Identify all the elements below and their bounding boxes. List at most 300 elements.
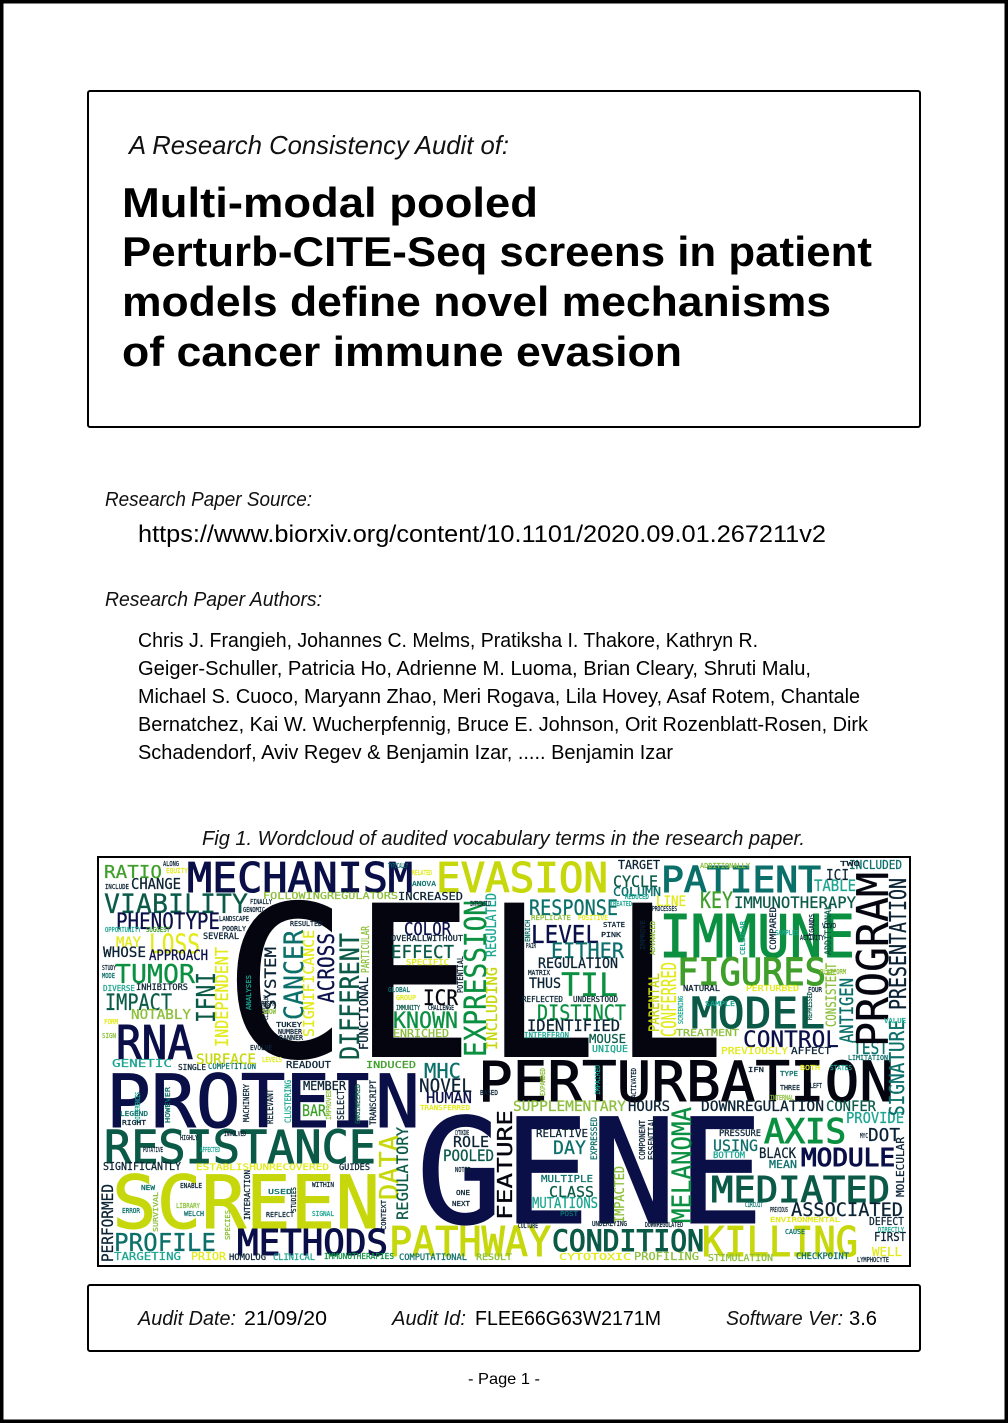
- medium horizontal words: GENETIC: [112, 1057, 172, 1070]
- medium horizontal words: CONTROL: [743, 1028, 839, 1053]
- small filler words: ENABLE: [180, 1182, 202, 1190]
- vertical words: PERFORMED: [98, 1184, 117, 1262]
- small filler words: FORM: [104, 1018, 118, 1026]
- small filler words: VALUE: [884, 1017, 906, 1025]
- small filler words: PUTATIVE: [143, 1146, 163, 1154]
- large words: FIGURES: [677, 951, 826, 994]
- medium horizontal words: CONFER: [826, 1099, 877, 1115]
- medium horizontal words: REGULATION: [538, 956, 618, 972]
- vertical words: MELANOMA: [667, 1107, 698, 1223]
- medium horizontal words: [103, 858, 906, 1264]
- large words: AXIS: [764, 1112, 846, 1152]
- medium horizontal words: EFFECT: [391, 942, 454, 963]
- small filler words: CULTURE: [518, 1222, 538, 1230]
- large words: PATHWAY: [389, 1218, 551, 1266]
- vertical words: ENRICH: [524, 920, 532, 942]
- small filler words: INTRINSIC: [470, 900, 490, 908]
- medium horizontal words: ICI: [826, 866, 849, 884]
- small filler words: WITHIN: [312, 1181, 334, 1189]
- small filler words: REFLECT: [266, 1211, 295, 1219]
- medium horizontal words: SINGLE: [178, 1063, 206, 1072]
- small filler words: CHALLENGE: [428, 1004, 454, 1012]
- word: CELL: E: [354, 863, 473, 1106]
- medium horizontal words: RESULT: [476, 1253, 513, 1263]
- panel: audit footer: Audit Id:: [391, 1308, 466, 1330]
- large words: [104, 854, 895, 1266]
- small filler words: TWO: [840, 860, 860, 868]
- word: CELL: [224, 863, 724, 1106]
- medium horizontal words: COLUMN: [613, 885, 661, 899]
- vertical words: ADVANCED: [649, 921, 657, 955]
- vertical words: PRESENTATION: [886, 878, 912, 1010]
- vertical words: PARENTAL: [647, 973, 663, 1032]
- vertical words: EXPRESSION: [459, 900, 494, 1057]
- medium horizontal words: INCLUDED: [849, 858, 902, 872]
- vertical words: SCREENING: [677, 996, 685, 1024]
- medium horizontal words: OVERALLWITHOUT: [391, 934, 463, 943]
- small filler words: SUGGEST: [146, 926, 171, 934]
- medium horizontal words: AFFECT: [791, 1046, 831, 1057]
- medium horizontal words: DISTINCT: [537, 1001, 626, 1025]
- small filler words: VIVO: [822, 922, 836, 930]
- panel: audit footer: FLEE66G63W2171M: [475, 1308, 661, 1330]
- medium horizontal words: DOWNREGULATION: [701, 1099, 824, 1115]
- small filler words: GLOBAL: [388, 986, 410, 994]
- small filler words: ACTIVITY: [800, 934, 825, 942]
- small filler words: SAMPLE: [705, 1000, 735, 1008]
- medium horizontal words: PROFILING: [634, 1250, 699, 1263]
- medium horizontal words: CHANGE: [131, 875, 181, 893]
- vertical words: SIGNATURE: [885, 1020, 909, 1116]
- small filler words: REDUCED: [625, 893, 649, 901]
- medium horizontal words: HUMAN: [426, 1089, 472, 1107]
- large words: IMMUNE: [659, 902, 855, 971]
- large words: MEDIATED: [711, 1170, 890, 1211]
- medium horizontal words: SEVERAL: [203, 932, 239, 942]
- small filler words: POSITIVE: [578, 914, 608, 922]
- small filler words: BANNER: [279, 1034, 304, 1042]
- medium horizontal words: TIL: [561, 966, 618, 1004]
- small filler words: ADDITIONALLY: [700, 862, 751, 870]
- vertical words: CONSISTENT: [824, 963, 840, 1027]
- small filler words: LANDSCAPE: [219, 915, 249, 923]
- medium horizontal words: WHOSE: [103, 945, 146, 961]
- small filler words: THREE: [780, 1084, 800, 1092]
- medium horizontal words: RATIO: [104, 862, 162, 883]
- medium horizontal words: PERTURBED: [746, 984, 799, 993]
- small filler words: RESULTED: [290, 920, 322, 928]
- medium horizontal words: MOUSE: [589, 1032, 626, 1046]
- medium horizontal words: TABLE: [814, 876, 856, 895]
- title: paper name: Multi-modal pooled: [122, 179, 538, 226]
- small filler words: INTERNAL: [770, 1094, 794, 1102]
- small filler words: CAUSE: [785, 1228, 805, 1236]
- vertical words: DATA: [375, 1135, 405, 1200]
- text block: research paper authors: Bernatchez, Kai W. Wucherpfennig, Bruce E. Johnson, Orit Rozenblatt-Rosen, Dirk: [138, 714, 869, 736]
- subtitle: audit heading: A Research Consistency Audit of:: [127, 130, 509, 160]
- small filler words: TYPICALLY: [388, 862, 408, 870]
- vertical words: DIFFERENT: [335, 933, 366, 1060]
- small filler words: ANOVA: [412, 880, 437, 888]
- medium horizontal words: UNDERSTOOD: [573, 995, 618, 1004]
- vertical words: PROGRAM: [848, 872, 899, 1047]
- panel: audit footer: Software Ver:: [726, 1308, 843, 1330]
- medium horizontal words: COMPETITION: [208, 1062, 256, 1071]
- medium horizontal words: IDENTIFIED: [527, 1016, 620, 1035]
- small filler words: CRISPR: [259, 1000, 275, 1008]
- small filler words: STATES: [830, 1064, 852, 1072]
- medium horizontal words: TEST: [853, 1038, 888, 1059]
- small filler words: TRANSFERRED: [420, 1104, 470, 1112]
- medium horizontal words: RESPONSE: [529, 896, 618, 920]
- vertical words: [98, 872, 912, 1262]
- medium horizontal words: GUIDES: [339, 1163, 370, 1173]
- vertical words: STUDIES: [290, 1187, 298, 1212]
- small filler words: DOWNREGULATED: [645, 1221, 683, 1229]
- vertical words: IFNI: [192, 972, 222, 1023]
- vertical words: ESSENTIAL: [647, 1117, 658, 1160]
- small filler words: RIGHT: [122, 1119, 147, 1127]
- medium horizontal words: CHECKPOINT: [796, 1252, 850, 1262]
- large words: GENE: [416, 1088, 764, 1258]
- medium horizontal words: USING: [713, 1136, 758, 1155]
- vertical words: EXPANDED: [539, 1068, 547, 1096]
- small filler words: PREVIOUS: [770, 1206, 788, 1214]
- text block: research paper source: https://www.biorxiv.org/content/10.1101/2020.09.01.267211v2: [138, 521, 826, 548]
- medium horizontal words: FIRST: [874, 1230, 906, 1244]
- text block: research paper authors: Chris J. Frangieh, Johannes C. Melms, Pratiksha I. Thakore, Kathryn R.: [138, 630, 758, 652]
- large words: MODULE: [801, 1143, 895, 1172]
- medium horizontal words: COLOR: [404, 919, 451, 940]
- vertical words: IMPAIRED: [594, 1065, 602, 1095]
- vertical words: ENGINEERED: [354, 1084, 362, 1124]
- medium horizontal words: PRIOR: [191, 1250, 226, 1263]
- small filler words: LEFT: [810, 1082, 823, 1090]
- medium horizontal words: MAY: [116, 935, 142, 951]
- small filler words: PLATFORM: [820, 968, 846, 976]
- large words: SCREEN: [112, 1161, 380, 1246]
- vertical words: POTENTIAL: [456, 956, 465, 993]
- medium horizontal words: BLACK: [759, 1146, 796, 1162]
- medium horizontal words: MEMBER: [303, 1079, 347, 1093]
- medium horizontal words: INHIBITORS: [136, 983, 188, 993]
- large words: MODEL: [691, 989, 825, 1039]
- small filler words: INVOLVED: [224, 1130, 246, 1138]
- medium horizontal words: SIGNIFICANTLY: [103, 1160, 181, 1173]
- title: paper name: models define novel mechanisms: [122, 278, 831, 325]
- medium horizontal words: INTERFERON: [524, 1031, 569, 1040]
- small filler words: TREATED: [610, 900, 632, 908]
- small filler words: LYMPHOCYTE: [857, 1256, 889, 1264]
- vertical words: FEATURE: [493, 1110, 517, 1220]
- title: paper name: [122, 179, 872, 375]
- vertical words: SELECT: [336, 1090, 347, 1120]
- small filler words: SAMPLES: [775, 929, 799, 937]
- panel: audit footer: [88, 1285, 920, 1351]
- small filler words: REPLICATE: [531, 914, 571, 922]
- text block: research paper authors: Research Paper Authors:: [105, 589, 322, 611]
- vertical words: ACTIVATED: [630, 1068, 638, 1098]
- medium horizontal words: MULTIPLE: [541, 1174, 593, 1185]
- medium horizontal words: MEAN: [769, 1158, 797, 1171]
- medium horizontal words: VIABILITY: [104, 889, 248, 920]
- small filler words: PINK: [601, 931, 622, 939]
- medium horizontal words: CLINICAL: [273, 1253, 315, 1263]
- vertical words: RELEVANT: [266, 1089, 276, 1124]
- large words: EVASION: [436, 854, 608, 902]
- vertical words: EXPRESSED: [590, 1117, 600, 1160]
- medium horizontal words: PHENOTYPE: [116, 910, 220, 935]
- small filler words: EVOLVE: [250, 1044, 272, 1052]
- vertical words: MOLECULAR: [894, 1137, 907, 1197]
- panel: audit footer: 3.6: [849, 1308, 877, 1330]
- small filler words: MATRIX: [528, 969, 551, 977]
- small filler words: SIGN: [102, 1032, 116, 1040]
- medium horizontal words: REFLECTED: [522, 995, 563, 1004]
- medium horizontal words: DIVERSE: [103, 984, 135, 993]
- medium horizontal words: INCREASED: [398, 890, 463, 903]
- medium horizontal words: ESTABLISHUNRECOVERED: [196, 1163, 329, 1173]
- vertical words: COMPARED: [769, 907, 779, 950]
- medium horizontal words: READOUT: [286, 1060, 331, 1071]
- small filler words: FINALLY: [250, 898, 273, 906]
- small filler words: POST: [560, 1210, 579, 1218]
- medium horizontal words: CYTOTOXIC: [559, 1252, 631, 1263]
- vertical words: LIGANDS: [808, 914, 816, 940]
- vertical words: FUNCTIONAL: [357, 977, 371, 1050]
- small filler words: RELATED: [412, 869, 432, 877]
- medium horizontal words: NOVEL: [419, 1075, 472, 1097]
- text block: research paper source: [105, 489, 826, 548]
- medium horizontal words: APPROACH: [149, 948, 208, 964]
- small filler words: LEVELS: [262, 1056, 282, 1064]
- medium horizontal words: PROFILE: [114, 1228, 216, 1257]
- small filler words: GROUP: [396, 994, 416, 1002]
- medium horizontal words: PRESSURE: [719, 1129, 761, 1139]
- medium horizontal words: BAR: [302, 1101, 326, 1120]
- medium horizontal words: IMMUNOTHERAPY: [734, 893, 856, 912]
- vertical words: IMPROVED: [325, 1090, 333, 1120]
- medium horizontal words: COMPUTATIONAL: [399, 1253, 467, 1263]
- small filler words: SHOW: [262, 1008, 277, 1016]
- medium horizontal words: ROLE: [453, 1133, 489, 1151]
- small filler words: [102, 860, 906, 1264]
- small filler words: ERROR: [122, 1207, 141, 1215]
- medium horizontal words: SURFACE: [196, 1052, 256, 1068]
- small filler words: IMMUNITY: [396, 1004, 421, 1012]
- vertical words: ADDITIONAL: [824, 905, 834, 955]
- medium horizontal words: DEFECT: [869, 1215, 904, 1228]
- vertical words: INCLUDING: [483, 967, 501, 1050]
- small filler words: NEW: [141, 1184, 156, 1192]
- vertical words: CLINICALLY: [263, 995, 270, 1020]
- small filler words: ONE: [456, 1189, 470, 1197]
- small filler words: LEGEND: [120, 1110, 148, 1118]
- small filler words: TYPE: [780, 1070, 798, 1078]
- small filler words: LIMITATION: [848, 1054, 888, 1062]
- medium horizontal words: TUMOR: [115, 960, 195, 990]
- vertical words: HOWEVER: [164, 1086, 172, 1123]
- medium horizontal words: SPECIFIC: [406, 958, 449, 967]
- small filler words: EQUITY: [166, 867, 189, 875]
- medium horizontal words: ICR: [423, 986, 458, 1010]
- vertical words: ANTIGEN: [836, 978, 858, 1043]
- small filler words: NUMBER: [278, 1028, 303, 1036]
- vertical words: CELLULAR: [739, 920, 747, 955]
- large words: CONDITION: [552, 1224, 704, 1258]
- word: CELL: L: [614, 863, 724, 1106]
- vertical words: IMPROVE: [639, 920, 647, 950]
- small filler words: MODE: [102, 972, 115, 980]
- medium horizontal words: LEVEL: [531, 920, 599, 949]
- vertical words: CANCER: [279, 929, 310, 1020]
- large words: PROTEIN: [106, 1060, 420, 1145]
- medium horizontal words: WELL: [872, 1245, 902, 1259]
- medium horizontal words: MHC: [424, 1059, 461, 1083]
- large words: RESISTANCE: [104, 1121, 376, 1174]
- page number: - Page 1 -: [468, 1371, 540, 1388]
- text block: research paper source: Research Paper Source:: [105, 489, 312, 511]
- medium horizontal words: UNIQUE: [592, 1044, 628, 1055]
- medium horizontal words: CYCLE: [613, 872, 658, 891]
- small filler words: ENVIRONMENTAL: [770, 1216, 840, 1224]
- medium horizontal words: INDUCED: [366, 1060, 416, 1071]
- small filler words: BASED: [480, 1089, 498, 1097]
- small filler words: STUDY: [102, 964, 117, 972]
- chart: wordcloud of audited vocabulary terms: [98, 854, 912, 1266]
- vertical words: REGULATED: [484, 893, 500, 957]
- medium horizontal words: CLASS: [549, 1183, 594, 1201]
- small filler words: GENOMIC: [243, 906, 265, 914]
- vertical words: REPRESSED: [806, 992, 814, 1020]
- vertical words: SYSTEM: [261, 947, 280, 1010]
- medium horizontal words: ASSOCIATED: [791, 1199, 903, 1221]
- small filler words: STATE: [603, 921, 625, 929]
- small filler words: DIRECTLY: [878, 1226, 905, 1234]
- vertical words: SURVIVAL: [152, 1192, 160, 1232]
- text block: research paper authors: Geiger-Schuller, Patricia Ho, Adrienne M. Luoma, Brian Cleary, Shruti Malu,: [138, 658, 811, 680]
- medium horizontal words: ENRICHED: [393, 1027, 449, 1040]
- panel: audit footer: 21/09/20: [244, 1308, 327, 1330]
- panel: audit footer: Audit Date:: [137, 1308, 236, 1330]
- small filler words: ALONG: [163, 860, 179, 868]
- vertical words: TRANSCRIPT: [369, 1080, 379, 1125]
- small filler words: OPPORTUNITY: [105, 926, 142, 934]
- small filler words: BOTH: [800, 1064, 820, 1072]
- large words: PATIENT: [661, 860, 821, 901]
- vertical words: SPECIES: [224, 1210, 232, 1240]
- medium horizontal words: HOURS: [628, 1099, 670, 1115]
- vertical words: COMPONENT: [638, 1120, 647, 1160]
- small filler words: WELCH: [184, 1210, 204, 1218]
- medium horizontal words: BOTTOM: [713, 1151, 746, 1161]
- medium horizontal words: DAY: [553, 1137, 587, 1159]
- text block: research paper authors: [105, 589, 869, 764]
- medium horizontal words: NOTABLY: [131, 1008, 191, 1023]
- vertical words: DIFFERENCES: [134, 1092, 142, 1122]
- vertical words: CONTEXT: [380, 1199, 388, 1230]
- medium horizontal words: DOT: [868, 1125, 900, 1146]
- medium horizontal words: TARGETING: [114, 1250, 181, 1263]
- medium horizontal words: KEY: [700, 889, 733, 914]
- medium horizontal words: POOLED: [443, 1146, 494, 1165]
- large words: METHODS: [237, 1223, 388, 1264]
- medium horizontal words: LINE: [656, 894, 686, 910]
- small filler words: POORLY: [222, 925, 247, 933]
- small filler words: SIGNAL: [312, 1210, 334, 1218]
- large words: MECHANISM: [187, 854, 413, 902]
- vertical words: CLUSTERING: [284, 1080, 294, 1123]
- medium horizontal words: KNOWN: [393, 1009, 458, 1034]
- vertical words: PARTICULAR: [359, 926, 372, 973]
- medium horizontal words: PROVIDE: [846, 1109, 904, 1127]
- caption: figure 1: Fig 1. Wordcloud of audited vocabulary terms in the research paper.: [202, 828, 805, 850]
- medium horizontal words: PREVIOUSLY: [721, 1046, 788, 1057]
- panel: title box: [88, 91, 920, 427]
- vertical words: ANALYSES: [245, 975, 253, 1010]
- small filler words: FOUR: [808, 986, 823, 994]
- vertical words: INDEPENDENT: [212, 947, 233, 1047]
- medium horizontal words: MUTATIONS: [532, 1194, 598, 1212]
- small filler words: PAIR: [526, 942, 536, 950]
- small filler words: NOTED: [455, 1166, 471, 1174]
- small filler words: CIRCUIT: [745, 1201, 763, 1209]
- small filler words: TUKEY: [276, 1021, 303, 1029]
- word: CELL: C: [224, 863, 347, 1106]
- medium horizontal words: LOSS: [149, 929, 200, 960]
- large words: RNA: [116, 1016, 193, 1070]
- small filler words: HIGHLY: [180, 1134, 199, 1142]
- vertical words: REGULATORY: [393, 1127, 412, 1220]
- small filler words: CYTOKINE: [455, 1129, 469, 1137]
- vertical words: SIGNIFICANCE: [300, 930, 318, 1037]
- small filler words: PROCESSES: [652, 905, 677, 913]
- medium horizontal words: HOMOLOG: [229, 1253, 266, 1263]
- small filler words: USED: [268, 1188, 292, 1196]
- medium horizontal words: IMPACT: [105, 991, 172, 1016]
- word: CELL: L: [486, 863, 596, 1106]
- medium horizontal words: THUS: [529, 976, 561, 992]
- medium horizontal words: NATURAL: [683, 984, 720, 993]
- medium horizontal words: RELATIVE: [536, 1127, 588, 1140]
- text block: research paper authors: Schadendorf, Aviv Regev & Benjamin Izar, ..... Benjamin Izar: [138, 742, 673, 764]
- small filler words: AFFECTED: [200, 1146, 220, 1154]
- medium horizontal words: STIMULATION: [708, 1253, 773, 1264]
- medium horizontal words: IMMUNOTHERAPIES: [324, 1252, 394, 1261]
- large words: PERTURBATION: [478, 1050, 894, 1114]
- vertical words: ACROSS: [315, 933, 340, 1003]
- vertical words: IMPACTED: [613, 1166, 628, 1223]
- medium horizontal words: TARGET: [618, 858, 660, 872]
- text block: research paper authors: Michael S. Cuoco, Maryann Zhao, Meri Rogava, Lila Hovey, Asaf Rotem, Chantale: [138, 686, 860, 708]
- vertical words: CONFERRED: [657, 962, 681, 1037]
- medium horizontal words: SUPPLEMENTARY: [513, 1099, 627, 1115]
- medium horizontal words: FOLLOWINGREGULATORS: [263, 891, 398, 902]
- large words: KILLING: [702, 1218, 858, 1266]
- small filler words: UNDERLYING: [592, 1220, 627, 1228]
- vertical words: MACHINERY: [242, 1084, 251, 1122]
- medium horizontal words: EITHER: [551, 939, 624, 963]
- medium horizontal words: TREATMENT: [676, 1028, 739, 1039]
- small filler words: LIBRARY: [176, 1202, 201, 1210]
- vertical words: INTERACTION: [243, 1170, 252, 1220]
- small filler words: MYC: [860, 1132, 868, 1140]
- title: paper name: of cancer immune evasion: [122, 328, 682, 375]
- small filler words: INCLUDE: [105, 883, 129, 891]
- title: paper name: Perturb-CITE-Seq screens in patient: [122, 228, 872, 275]
- small filler words: IFN: [748, 1066, 764, 1074]
- small filler words: NEXT: [452, 1200, 471, 1208]
